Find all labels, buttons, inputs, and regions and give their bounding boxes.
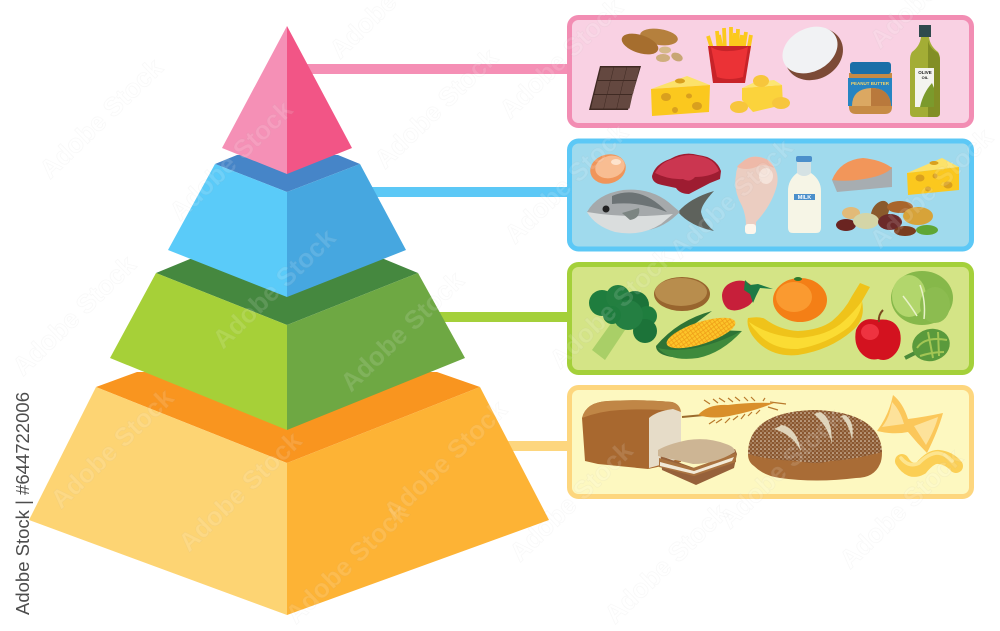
tier: protein and dairy (blue) <box>168 155 406 297</box>
icon: cabbage <box>891 271 953 325</box>
tier: fats and sweets (pink) <box>222 26 352 174</box>
stock image id caption: Adobe Stock | #644722006 <box>12 392 33 615</box>
icon: mixed nuts <box>836 198 938 236</box>
watermark text: Adobe Stock <box>163 94 299 226</box>
connector lines <box>305 64 570 451</box>
icon: orange <box>773 277 827 322</box>
watermark text: Adobe Stock <box>498 117 634 249</box>
food pyramid <box>29 26 549 615</box>
watermark text: Adobe Stock <box>503 435 639 567</box>
icon: red meat <box>652 154 721 194</box>
icon: banana <box>748 283 870 355</box>
watermark text: Adobe Stock <box>279 497 415 629</box>
icon: round bread <box>748 410 882 480</box>
icon: bread loaf <box>582 400 681 469</box>
tier: fruit and vegetables (green) <box>110 259 465 430</box>
panel: fruit and vegetables <box>570 264 972 372</box>
panel: protein and dairy <box>570 141 972 249</box>
watermark text: Adobe Stock <box>6 249 142 381</box>
icon: olive oil bottle: OIL <box>922 75 929 80</box>
icon: fish <box>587 190 714 233</box>
watermark text: Adobe Stock <box>172 425 308 557</box>
watermark text: Adobe Stock <box>543 242 679 374</box>
watermark text: Adobe Stock <box>44 382 180 514</box>
panel: grains <box>570 388 972 496</box>
icon: strawberry <box>722 280 773 310</box>
icon: egg <box>587 150 629 188</box>
icon: rotini pasta <box>901 453 956 470</box>
watermark text: Adobe Stock <box>713 402 849 534</box>
icon: salmon steak <box>832 158 892 192</box>
icon: broccoli <box>589 285 657 360</box>
tier: grains (yellow) <box>29 372 549 615</box>
icon: milk bottle <box>788 156 821 233</box>
icon: chicken leg <box>735 157 778 234</box>
icon: artichoke <box>905 325 953 365</box>
watermark text: Adobe Stock <box>663 132 799 264</box>
watermark text: Adobe Stock <box>206 222 342 354</box>
icon: corn <box>656 311 742 359</box>
icon: milk bottle: MILK <box>798 195 811 201</box>
watermark text: Adobe Stock <box>833 442 969 574</box>
watermark text: Adobe Stock <box>334 265 470 397</box>
panel: fats and sweets <box>570 17 972 126</box>
icon: cheese wedge small <box>907 158 959 195</box>
watermark text: Adobe Stock <box>598 497 734 629</box>
icon: peanut butter jar <box>848 62 892 114</box>
watermark text: Adobe Stock <box>377 394 513 526</box>
icon: olive oil bottle: OLIVE <box>918 70 932 75</box>
icon: french fries <box>708 27 751 83</box>
watermark text: Adobe Stock <box>33 52 169 184</box>
icon: peanut butter jar: PEANUT BUTTER <box>851 81 890 86</box>
watermark text: Adobe Stock <box>863 122 999 254</box>
icon: chocolate bar <box>589 66 641 110</box>
icon: wheat ear <box>682 397 786 424</box>
icon: bread slices <box>658 439 737 485</box>
icon: olive oil bottle <box>910 25 940 117</box>
watermark text: Adobe Stock <box>368 42 504 174</box>
icon: peanuts <box>619 26 684 63</box>
icon: farfalle pasta <box>877 395 943 453</box>
icon: butter <box>730 75 790 113</box>
icon: cheese wedge <box>651 76 710 116</box>
icon: potato <box>654 277 710 311</box>
icon: coconut <box>774 17 852 90</box>
icon: apple <box>855 310 901 360</box>
